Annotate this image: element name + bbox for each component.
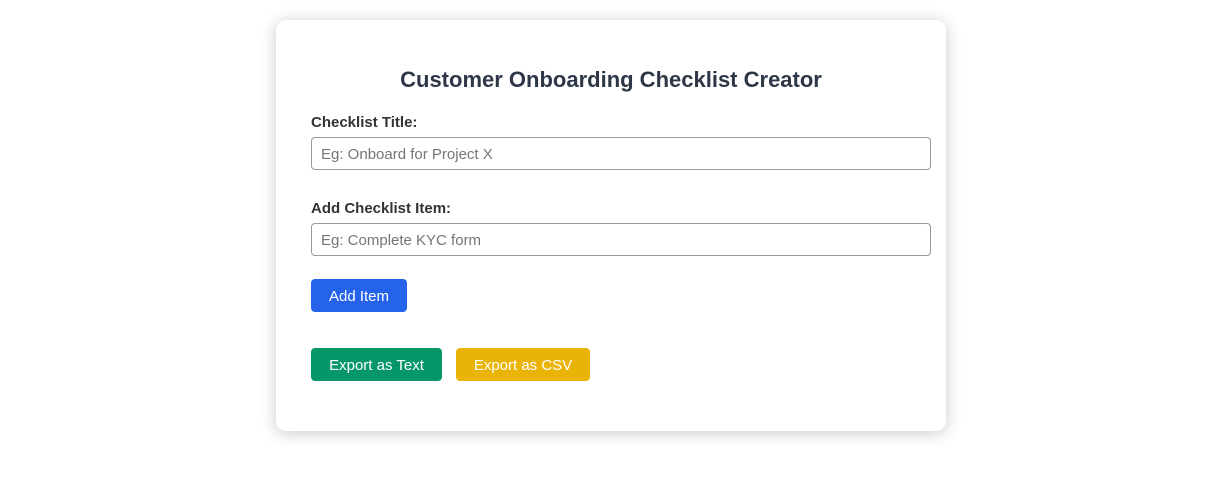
button: export as csv: Export as CSV <box>474 357 572 374</box>
input: checklist item: Eg: Complete KYC form <box>321 232 481 249</box>
button: export as text <box>311 348 442 381</box>
title: Customer Onboarding Checklist Creator <box>400 67 822 92</box>
label: checklist title: Checklist Title: <box>311 114 417 131</box>
button: add item: Add Item <box>329 288 389 305</box>
panel: checklist creator card <box>276 20 946 431</box>
button: add item <box>311 279 407 312</box>
button: export as text: Export as Text <box>329 357 424 374</box>
input: checklist title: Eg: Onboard for Project X <box>321 146 493 163</box>
label: add checklist item: Add Checklist Item: <box>311 200 451 217</box>
button: export as csv <box>456 348 590 381</box>
input: checklist item <box>311 223 931 256</box>
input: checklist title <box>311 137 931 170</box>
